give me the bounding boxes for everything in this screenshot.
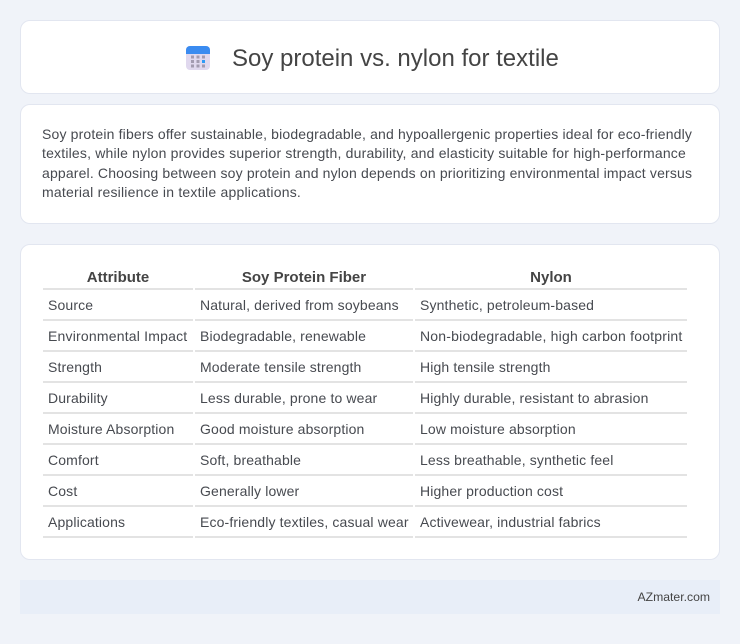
rows: High tensile strength — [420, 359, 551, 375]
rows: Strength — [48, 359, 102, 375]
text: textiles, while nylon provides superior strength, durability, and elasticity suitable for high-performance — [42, 145, 686, 161]
rows: Cost — [48, 483, 77, 499]
rows: Generally lower — [200, 483, 299, 499]
rows: Less breathable, synthetic feel — [420, 452, 613, 468]
rows: Higher production cost — [420, 483, 563, 499]
icon: calendar — [186, 46, 210, 70]
rows: Less durable, prone to wear — [200, 390, 377, 406]
rows: Natural, derived from soybeans — [200, 297, 399, 313]
rows: Activewear, industrial fabrics — [420, 514, 601, 530]
panel: title card — [20, 20, 720, 94]
table: comparison: Soy Protein Fiber — [242, 269, 366, 286]
rows: Source — [48, 297, 93, 313]
text: apparel. Choosing between soy protein and nylon depends on prioritizing environmental impact versus — [42, 165, 692, 181]
rows: Non-biodegradable, high carbon footprint — [420, 328, 683, 344]
panel: summary card — [20, 104, 720, 224]
rows: Low moisture absorption — [420, 421, 576, 437]
footer bar — [20, 580, 720, 614]
footer credit: AZmater.com — [638, 590, 710, 604]
title: Soy protein vs. nylon for textile — [232, 45, 559, 72]
table: comparison: Attribute — [87, 269, 149, 286]
text: Soy protein fibers offer sustainable, biodegradable, and hypoallergenic properties ideal for eco-friendly — [42, 126, 692, 142]
rows: Highly durable, resistant to abrasion — [420, 390, 649, 406]
text block: summary — [42, 126, 692, 200]
header row — [87, 269, 572, 286]
table: comparison — [43, 269, 687, 538]
rows: Applications — [48, 514, 125, 530]
rows: Comfort — [48, 452, 99, 468]
text: material resilience in textile applications. — [42, 184, 301, 200]
rows: Environmental Impact — [48, 328, 187, 344]
rows: Biodegradable, renewable — [200, 328, 366, 344]
rows: Moisture Absorption — [48, 421, 174, 437]
rows: Soft, breathable — [200, 452, 301, 468]
table: comparison: Nylon — [530, 269, 572, 286]
rows: Synthetic, petroleum-based — [420, 297, 594, 313]
rows: Good moisture absorption — [200, 421, 364, 437]
rows: Eco-friendly textiles, casual wear — [200, 514, 409, 530]
rows: Moderate tensile strength — [200, 359, 361, 375]
rows: Durability — [48, 390, 108, 406]
panel: comparison table card — [20, 244, 720, 560]
